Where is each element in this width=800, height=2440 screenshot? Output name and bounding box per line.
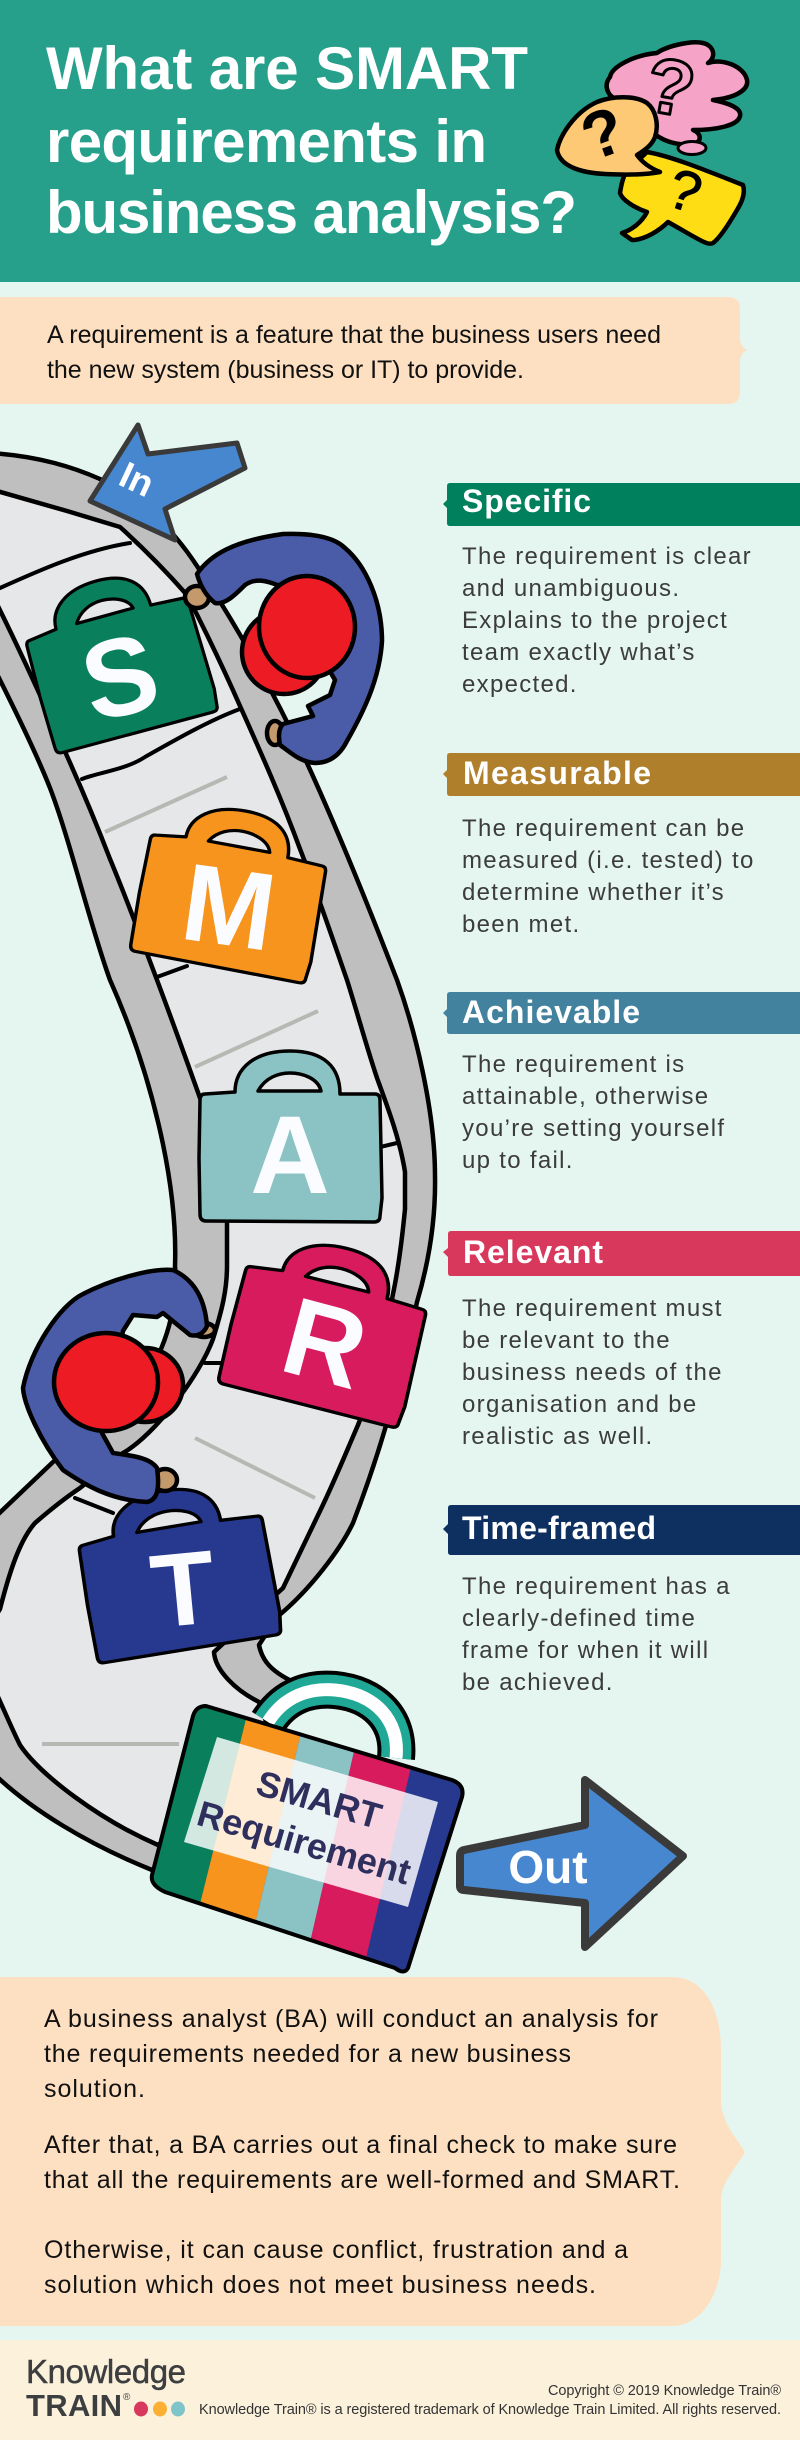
title: requirements in xyxy=(46,108,487,175)
icon: question speech bubbles: ? xyxy=(660,156,709,225)
panel: Time-framed: be achieved. xyxy=(462,1669,614,1696)
figure: lower worker xyxy=(23,1270,215,1502)
title xyxy=(46,35,577,246)
arrow: In: In xyxy=(113,454,160,505)
logo: Knowledge Train: TRAIN xyxy=(26,2388,122,2423)
panel: Specific: and unambiguous. xyxy=(462,575,680,602)
bag S: S xyxy=(71,609,170,746)
bag label: SMART xyxy=(252,1762,386,1837)
panel: Measurable: The requirement can be xyxy=(462,815,745,842)
final SMART requirement bag xyxy=(150,1670,465,1974)
footer xyxy=(0,2340,800,2440)
icon: question speech bubbles: ? xyxy=(639,40,702,135)
icon: question speech bubbles xyxy=(557,40,747,244)
belt joints xyxy=(0,543,397,1744)
bag T xyxy=(71,1475,283,1665)
title: What are SMART xyxy=(46,35,528,102)
panel: Specific: Specific xyxy=(462,483,591,519)
panel: Measurable: determine whether it’s xyxy=(462,879,725,906)
arrow: Out xyxy=(460,1780,683,1947)
copyright: Knowledge Train® is a registered trademark of Knowledge Train Limited. All rights reserved. xyxy=(199,2402,781,2418)
intro callout: the new system (business or IT) to provide. xyxy=(47,356,524,384)
bag handle xyxy=(268,1690,396,1758)
panel: Specific xyxy=(443,483,800,698)
panel: Relevant: Relevant xyxy=(463,1234,603,1270)
conveyor frame xyxy=(0,453,435,1870)
panel: Achievable: attainable, otherwise xyxy=(462,1083,709,1110)
panel: Relevant: The requirement must xyxy=(462,1295,723,1322)
panel: Achievable: Achievable xyxy=(462,994,640,1030)
bag M: M xyxy=(175,840,283,975)
conclusion callout: After that, a BA carries out a final check to make sure xyxy=(44,2131,677,2159)
bag colour stripes xyxy=(154,1708,460,1970)
panel: Relevant: realistic as well. xyxy=(462,1423,653,1450)
panel: Time-framed xyxy=(443,1505,800,1696)
logo: Knowledge Train: Knowledge xyxy=(26,2353,186,2390)
panel: Specific: The requirement is clear xyxy=(462,543,752,570)
conclusion callout: the requirements needed for a new business xyxy=(44,2040,571,2068)
icon: question speech bubbles: ? xyxy=(571,91,635,175)
conclusion callout: solution. xyxy=(44,2075,145,2103)
panel: Measurable: measured (i.e. tested) to xyxy=(462,847,755,874)
panel: Relevant: business needs of the xyxy=(462,1359,723,1386)
bag label: Requirement xyxy=(193,1792,416,1893)
illustration: conveyor belt with SMART bags xyxy=(0,425,683,1990)
panel: Achievable: up to fail. xyxy=(462,1147,574,1174)
panel: Time-framed: Time-framed xyxy=(462,1510,656,1546)
bag M xyxy=(129,795,336,984)
bag T: T xyxy=(146,1529,220,1651)
bag R xyxy=(216,1226,439,1429)
header band xyxy=(0,0,800,282)
conclusion callout xyxy=(0,1977,745,2326)
bag A xyxy=(199,1051,382,1222)
panel: Relevant xyxy=(443,1231,800,1450)
intro callout xyxy=(0,297,747,404)
panel: Time-framed: The requirement has a xyxy=(462,1573,731,1600)
logo: Knowledge Train: ® xyxy=(123,2392,131,2403)
conclusion callout: solution which does not meet business needs. xyxy=(44,2271,596,2299)
figure: top worker xyxy=(185,534,382,763)
panel: Time-framed: clearly-defined time xyxy=(462,1605,696,1632)
panel: Measurable: Measurable xyxy=(463,755,651,791)
bag R: R xyxy=(271,1274,379,1413)
logo: Knowledge Train xyxy=(26,2353,186,2423)
panel: Measurable: been met. xyxy=(462,911,580,938)
panel: Measurable xyxy=(443,753,800,938)
conclusion callout: Otherwise, it can cause conflict, frustration and a xyxy=(44,2236,628,2264)
title: business analysis? xyxy=(46,179,577,246)
intro callout: A requirement is a feature that the business users need xyxy=(47,321,661,349)
panel: Relevant: organisation and be xyxy=(462,1391,698,1418)
panel: Specific: Explains to the project xyxy=(462,607,728,634)
arrow: In xyxy=(90,425,245,540)
conveyor belt surface xyxy=(0,489,405,1845)
copyright: Copyright © 2019 Knowledge Train® xyxy=(548,2383,781,2399)
bag S xyxy=(14,558,220,755)
panel: Time-framed: frame for when it will xyxy=(462,1637,709,1664)
conclusion callout: that all the requirements are well-formed and SMART. xyxy=(44,2166,680,2194)
bag A: A xyxy=(250,1094,330,1217)
copyright xyxy=(199,2383,781,2418)
bag label xyxy=(184,1737,438,1907)
panel: Achievable: you’re setting yourself xyxy=(462,1115,725,1142)
panel: Achievable xyxy=(443,992,800,1174)
panel: Relevant: be relevant to the xyxy=(462,1327,671,1354)
panel: Specific: expected. xyxy=(462,671,578,698)
conclusion callout: A business analyst (BA) will conduct an analysis for xyxy=(44,2005,658,2033)
arrow: Out: Out xyxy=(508,1841,588,1893)
panel: Specific: team exactly what’s xyxy=(462,639,696,666)
panel: Achievable: The requirement is xyxy=(462,1051,686,1078)
